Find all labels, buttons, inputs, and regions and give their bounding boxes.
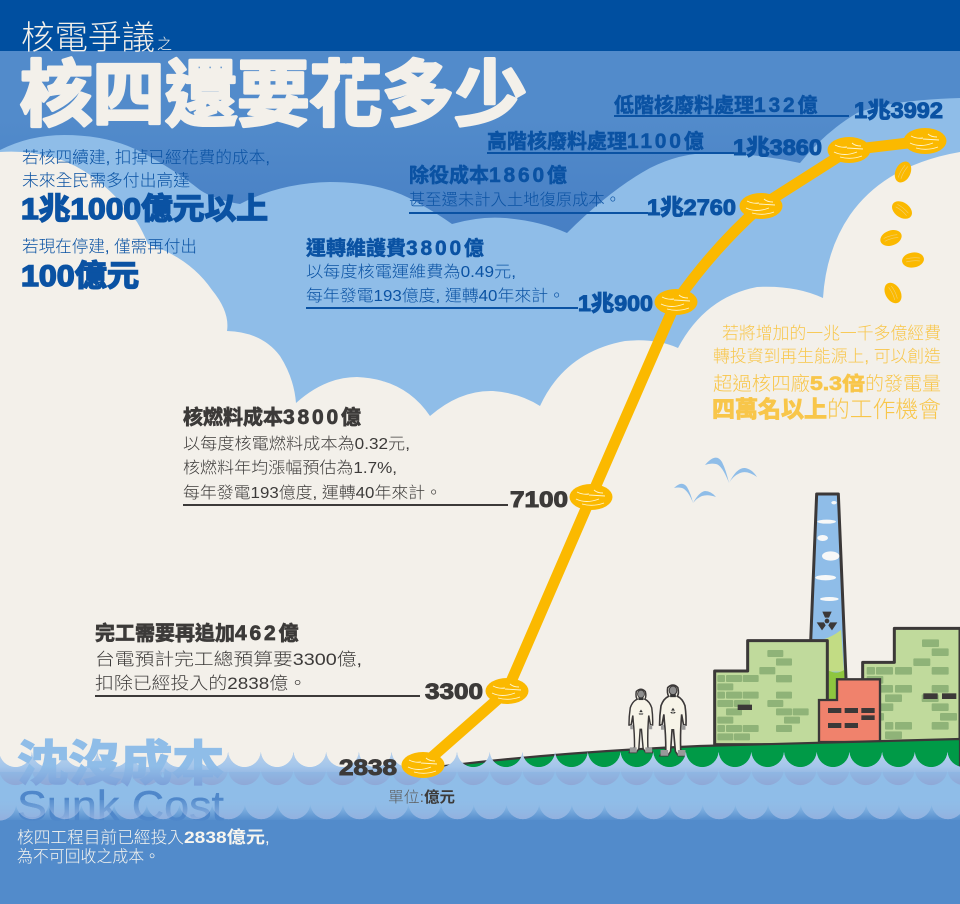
label: high-level waste: 高階核廢料處理1100億 [487, 129, 704, 153]
deep water transition [0, 805, 960, 821]
wave shadow lobes [0, 767, 960, 785]
label: low-level waste [614, 93, 943, 123]
label: nuclear fuel: 7100 [510, 487, 568, 512]
wave lower lobes [0, 790, 960, 821]
callout: renewable energy: 超過核四廠 [713, 373, 810, 395]
coin: 1兆2760 [740, 193, 782, 219]
label: decommissioning [409, 163, 736, 220]
sunk cost description: 核四工程目前已經投入 [17, 828, 184, 847]
label: decommissioning: 除役成本1860億 [409, 163, 567, 187]
intro text block [21, 148, 270, 293]
left building [715, 641, 827, 745]
coin: 1兆3992 [904, 128, 946, 154]
main title: 核四還要花多少 [20, 56, 527, 136]
title kicker: 核電爭議 [21, 19, 155, 56]
sunk cost description: , [265, 829, 270, 847]
label: nuclear fuel: 每年發電193億度, 運轉40年來計。 [183, 484, 442, 502]
callout: renewable energy: 四萬名以上 [712, 396, 827, 422]
birds [674, 458, 757, 503]
label: decommissioning: 1兆2760 [647, 195, 736, 220]
chimney [811, 494, 846, 700]
label: operations and maintenance: 以每度核電運維費為0.49元, [306, 263, 516, 281]
label: operations and maintenance: 1兆900 [578, 291, 653, 316]
intro text block: 100億元 [21, 260, 139, 293]
heading: sunk cost (english): Sunk Cost [17, 782, 224, 829]
label: completion cost: 台電預計完工總預算要3300億, [95, 650, 362, 669]
callout: renewable energy [712, 324, 941, 422]
intro text block: 未來全民需多付出高達 [22, 171, 190, 190]
intro text block: 1兆1000億元以上 [21, 193, 268, 226]
water upper wave [0, 752, 960, 904]
label: completion cost: 3300 [425, 679, 483, 704]
intro text block: 若核四續建, 扣掉已經花費的成本, [22, 148, 270, 167]
intro text block: 若現在停建, 僅需再付出 [22, 237, 197, 256]
right building [863, 628, 960, 743]
label: low-level waste: 低階核廢料處理132億 [614, 93, 817, 117]
label: operations and maintenance: 每年發電193億度, 運轉40年來計。 [306, 287, 565, 305]
callout: renewable energy: 轉投資到再生能源上, 可以創造 [713, 347, 941, 366]
label: operations and maintenance: 運轉維護費3800億 [306, 237, 484, 260]
sunk cost description: 2838億元 [184, 827, 265, 847]
label: nuclear fuel: 核燃料年均漲幅預估為1.7%, [183, 459, 397, 477]
coin: 2838 [402, 752, 444, 778]
icon: radiation [817, 612, 837, 630]
coin: 1兆900 [654, 289, 698, 315]
falling coins [878, 159, 925, 306]
unit note: 單位: [388, 789, 424, 806]
label: nuclear fuel: 核燃料成本3800億 [183, 405, 361, 429]
heading: sunk cost (chinese): 沈沒成本 [17, 738, 224, 791]
wave lower shading [0, 800, 960, 821]
callout: renewable energy: 的發電量 [865, 373, 941, 395]
label: operations and maintenance [306, 237, 653, 316]
header band [0, 0, 960, 51]
label: completion cost: 扣除已經投入的2838億。 [95, 674, 307, 693]
label: completion cost [95, 621, 483, 704]
sunk cost description [17, 827, 270, 866]
hazmat workers [629, 685, 686, 756]
label: completion cost: 完工需要再追加462億 [95, 621, 298, 645]
rising cost line [423, 141, 925, 765]
water highlight band [0, 752, 960, 772]
label: high-level waste: 1兆3860 [733, 135, 822, 160]
label: nuclear fuel [183, 405, 568, 512]
unit note: 億元 [424, 789, 455, 806]
callout: renewable energy: 的工作機會 [827, 396, 941, 422]
coin: 1兆3860 [828, 137, 870, 163]
sunk cost description: 為不可回收之成本。 [17, 847, 160, 866]
value: 2838: 2838 [339, 755, 397, 780]
label: high-level waste [487, 129, 822, 160]
land [445, 739, 960, 775]
label: low-level waste: 1兆3992 [854, 98, 943, 123]
label: nuclear fuel: 以每度核電燃料成本為0.32元, [183, 435, 410, 453]
title kicker: 之 [157, 36, 172, 53]
nuclear power plant [715, 494, 960, 745]
coin: 3300 [486, 678, 528, 704]
unit note [388, 789, 455, 806]
label: decommissioning: 甚至還未計入土地復原成本。 [409, 191, 621, 209]
cloud: light blue [0, 98, 960, 520]
deep water fill [0, 820, 960, 904]
callout: renewable energy: 若將增加的一兆一千多億經費 [722, 324, 941, 343]
pink annex building [819, 679, 880, 742]
callout: renewable energy: 5.3倍 [810, 372, 865, 395]
coin: 7100 [570, 484, 612, 510]
